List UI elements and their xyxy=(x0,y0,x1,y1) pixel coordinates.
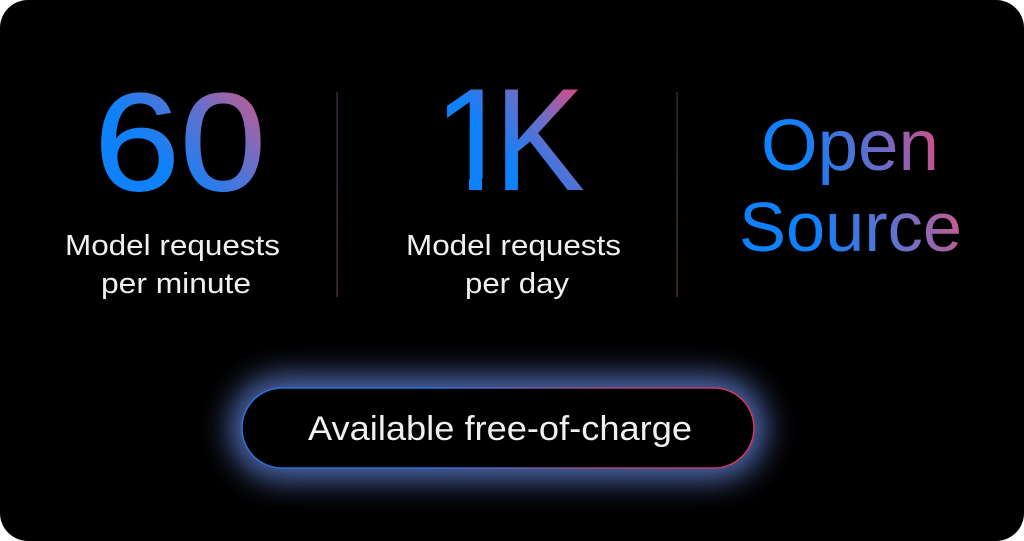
stat: open source xyxy=(739,106,962,266)
number: 1K: 1 xyxy=(433,58,514,221)
label: model requests per minute: per minute xyxy=(101,268,251,300)
label: model requests per minute: Model requests xyxy=(65,230,280,262)
callout: available free-of-charge pill xyxy=(230,376,766,480)
number: 60: 60 xyxy=(94,65,266,220)
divider: right xyxy=(676,92,678,297)
stat: 1K requests per day xyxy=(408,90,620,299)
word: Open: Open xyxy=(761,106,939,186)
label: model requests per day: per day xyxy=(465,268,570,300)
number: 1K: K xyxy=(494,58,585,221)
word: Source: Source xyxy=(739,188,962,266)
stat: 60 requests per minute xyxy=(65,65,280,300)
number: 1K xyxy=(447,90,584,190)
label: model requests per day xyxy=(406,230,621,300)
label: model requests per day: Model requests xyxy=(406,230,621,262)
pill text: Available free-of-charge xyxy=(308,410,692,448)
divider: left xyxy=(336,92,338,297)
label: model requests per minute xyxy=(65,230,280,300)
